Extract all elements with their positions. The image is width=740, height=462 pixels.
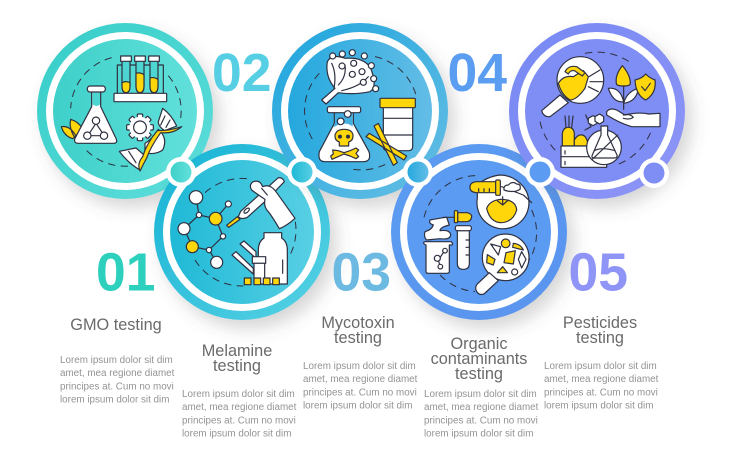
text block 3: principes at. Cum no movi <box>303 388 417 398</box>
text block 4: lorem ipsum dolor sit dim <box>424 428 533 440</box>
text block 1: principes at. Cum no movi <box>60 382 174 392</box>
icon: mycotoxin <box>305 50 416 170</box>
heading: Organic contaminants testing: testing <box>455 365 503 383</box>
ring 1 <box>37 23 213 199</box>
text block 4: principes at. Cum no movi <box>424 416 538 426</box>
icon: organic contaminants <box>424 175 537 294</box>
heading: Mycotoxin testing: testing <box>334 329 382 347</box>
text block 2: lorem ipsum dolor sit dim <box>182 428 291 440</box>
number 02: 02 <box>212 44 272 103</box>
panel: circle 4 Organic contaminants testing <box>391 144 567 320</box>
text block 2: principes at. Cum no movi <box>182 416 296 426</box>
ring 2 <box>154 144 330 320</box>
text block 3: amet, mea regione diamet <box>303 374 418 385</box>
heading: GMO testing: GMO testing <box>70 316 162 334</box>
ring 5 <box>509 23 685 199</box>
number 04: 04 <box>448 44 507 103</box>
icon: GMO lab <box>61 56 182 171</box>
heading: Melamine testing: Melamine <box>202 342 272 360</box>
text block 5: lorem ipsum dolor sit dim <box>544 400 653 412</box>
heading: Pesticides testing: Pesticides <box>563 314 637 332</box>
icon: pesticides <box>540 52 660 167</box>
text block 3: lorem ipsum dolor sit dim <box>303 400 412 412</box>
text block 1: Lorem ipsum dolor sit dim <box>60 355 173 366</box>
heading: Mycotoxin testing: Mycotoxin <box>321 314 395 332</box>
connector dots <box>166 157 669 188</box>
text block 5: Lorem ipsum dolor sit dim <box>544 361 657 372</box>
panel: circle 3 Mycotoxin testing <box>272 23 448 199</box>
text block 3: Lorem ipsum dolor sit dim <box>303 361 416 372</box>
text block 4: Lorem ipsum dolor sit dim <box>424 389 537 400</box>
text block 1: amet, mea regione diamet <box>60 368 175 379</box>
ring 3 <box>272 23 448 199</box>
panel: circle 5 Pesticides testing <box>509 23 685 199</box>
ring 4 <box>391 144 567 320</box>
heading: Pesticides testing: testing <box>576 329 624 347</box>
text block 5: principes at. Cum no movi <box>544 388 658 398</box>
panel: circle 2 Melamine testing <box>154 144 330 320</box>
heading: Organic contaminants testing: contaminants <box>431 350 527 368</box>
number 01: 01 <box>96 244 156 302</box>
text block 4: amet, mea regione diamet <box>424 402 539 413</box>
text block 5: amet, mea regione diamet <box>544 374 659 385</box>
panel: circle 1 GMO testing <box>37 23 213 199</box>
number 03: 03 <box>332 244 391 302</box>
heading: Melamine testing: testing <box>213 357 261 375</box>
text block 2: Lorem ipsum dolor sit dim <box>182 389 295 400</box>
heading: Organic contaminants testing: Organic <box>450 335 508 353</box>
text block 2: amet, mea regione diamet <box>182 402 297 413</box>
text block 1: lorem ipsum dolor sit dim <box>60 394 169 406</box>
number 05: 05 <box>568 244 628 302</box>
icon: melamine test <box>178 178 296 286</box>
